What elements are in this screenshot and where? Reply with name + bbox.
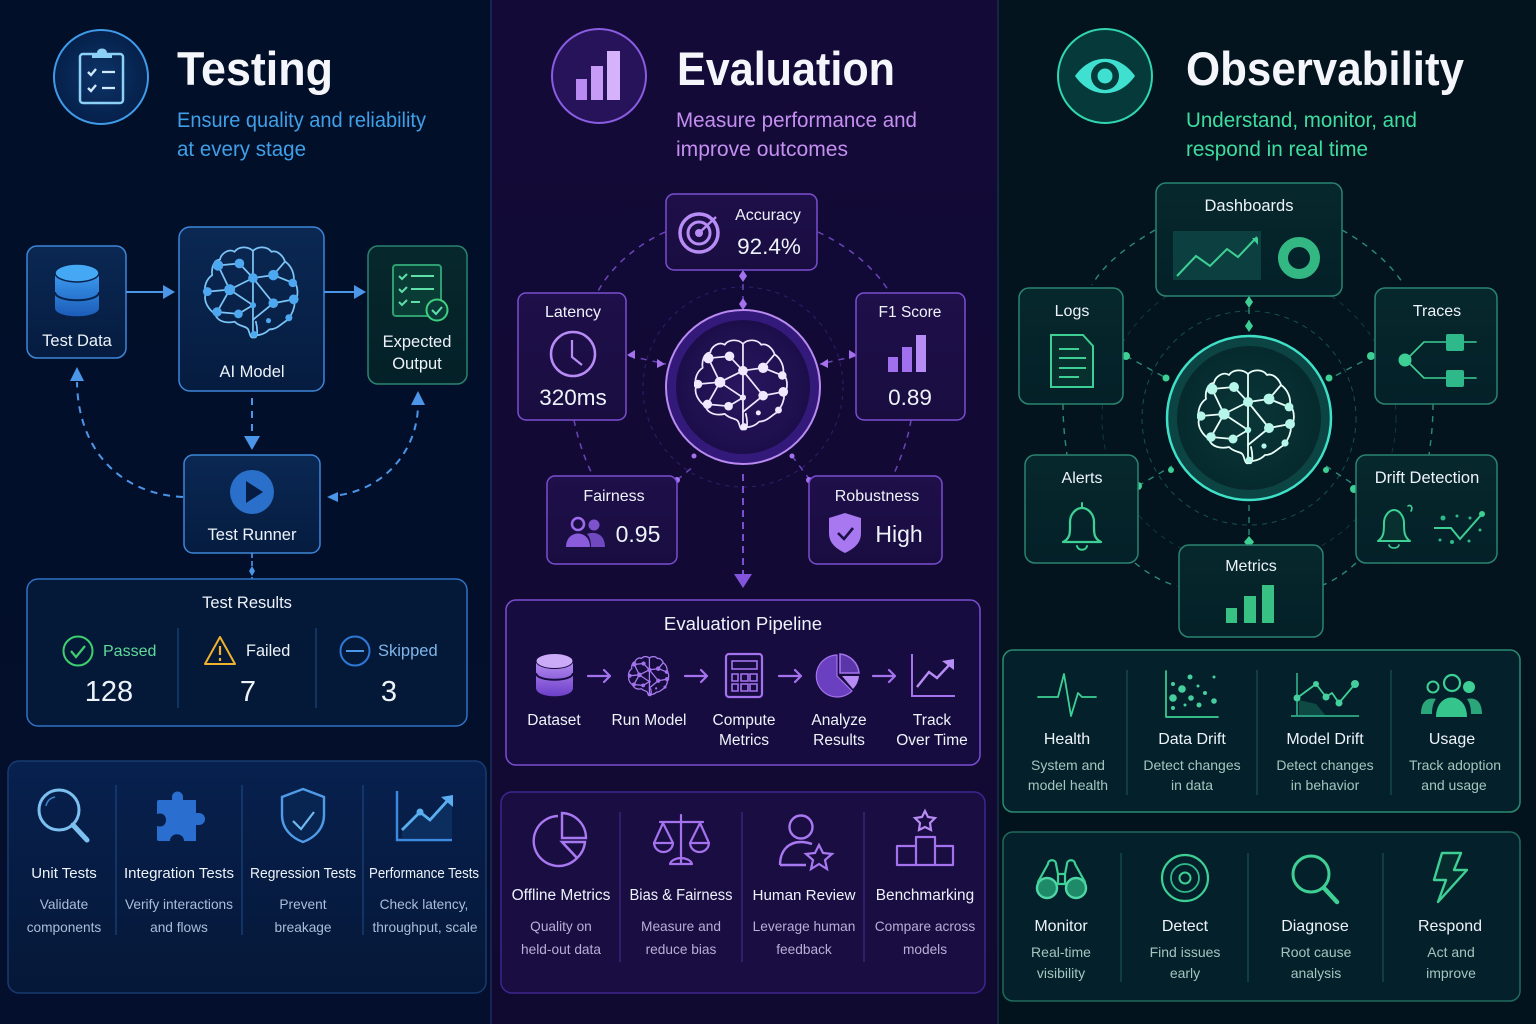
node: AI Model: AI Model [219,363,285,381]
arrow: model to output [324,285,366,299]
card: performance tests [369,791,479,935]
card: human review: Human Review [753,887,856,904]
card: data drift: Detect changes [1143,757,1241,773]
connector ring: evaluation orbit [574,232,911,487]
icon: clipboard checklist [54,30,148,124]
card: model drift: Detect changes [1276,757,1374,773]
card: performance tests: Check latency, [380,897,468,912]
card: monitor [1031,860,1091,981]
card: health: System and [1031,757,1105,773]
card: unit tests: components [27,920,101,935]
node: logs: Logs [1055,303,1089,320]
connector: runner to results [249,553,255,579]
panel: observability column [998,0,1536,1024]
step: track over time: Over Time [896,732,968,749]
card: benchmarking: models [903,942,947,957]
metric: passed [64,636,156,708]
metric: latency: 320ms [539,385,607,410]
card: human review: feedback [776,942,832,957]
card: regression tests: Regression Tests [250,865,356,882]
card: diagnose: Diagnose [1281,918,1349,935]
card: regression tests: Prevent [279,897,327,912]
card: detect: early [1170,965,1200,981]
card: integration tests: Verify interactions [125,897,233,912]
card: usage: Track adoption [1409,757,1501,773]
icon: eye badge [1058,29,1152,123]
arrows: pipeline flow [588,670,895,682]
metric: latency: Latency [545,304,601,321]
panel: test results: Test Results [202,594,292,612]
panel: test results [27,579,467,726]
hub: evaluation brain [666,310,820,464]
heading: Observability: Observability [1186,42,1464,95]
arrow: data to model [126,285,175,299]
metric: fairness [547,476,677,564]
card: health: Health [1044,731,1090,748]
metric: passed: Passed [103,643,156,660]
panel: test types [8,761,486,993]
arrow: to pipeline [734,474,752,588]
panel: evaluation pipeline [506,600,980,765]
step: run model: Run Model [612,712,686,729]
card: human review [753,816,856,957]
subtitle: testing: at every stage [177,138,306,161]
card: integration tests [124,792,234,935]
card: regression tests [250,789,356,935]
card: usage [1409,675,1501,793]
metric: accuracy: Accuracy [735,207,801,224]
step: dataset: Dataset [527,712,581,729]
metric: robustness: High [875,521,923,547]
metric: f1 score [856,293,965,420]
card: performance tests: Performance Tests [369,865,479,882]
subtitle: testing: Ensure quality and reliability [177,109,426,132]
subtitle: observability [1186,109,1417,161]
card: monitor: visibility [1037,965,1085,981]
subtitle: evaluation: Measure performance and [676,109,917,132]
card: model drift: Model Drift [1286,731,1364,748]
card: health: model health [1028,777,1108,793]
metric: failed: 7 [240,676,256,708]
card: performance tests: throughput, scale [372,920,478,935]
card: usage: and usage [1421,777,1487,793]
card: model drift [1276,673,1374,793]
card: respond: Respond [1418,918,1482,935]
heading: Testing: Testing [177,42,333,95]
node: Test Runner: Test Runner [208,526,297,544]
metric: skipped: Skipped [378,642,438,660]
metric: skipped: 3 [381,676,397,708]
metric: failed: Failed [246,642,290,660]
node: AI Model [179,227,324,391]
step: dataset [527,654,581,729]
panel: evaluation column [491,0,998,1024]
card: bias and fairness: reduce bias [646,942,717,957]
node: traces [1375,288,1497,404]
card: monitor: Real-time [1031,944,1091,960]
connector ring: observability orbit [1063,230,1433,586]
card: benchmarking: Benchmarking [876,887,974,904]
node: drift detection: Drift Detection [1375,469,1479,487]
metric: fairness: Fairness [583,488,645,505]
card: bias and fairness: Bias & Fairness [630,887,733,904]
card: bias and fairness: Measure and [641,919,721,934]
card: monitor: Monitor [1034,918,1088,935]
step: analyze results: Results [813,732,865,749]
card: regression tests: breakage [274,920,332,935]
metric: latency [518,293,626,420]
metric: f1 score: F1 Score [879,304,941,321]
card: detect: Detect [1162,918,1209,935]
metric: robustness [809,476,942,564]
node: dashboards [1156,183,1342,296]
panel: monitored signals [1003,650,1520,812]
node: Test Runner [184,455,320,553]
node: alerts: Alerts [1062,470,1102,487]
panel: operations loop [1003,832,1520,1001]
card: data drift: in data [1171,777,1213,793]
node: Expected Output: Expected [383,333,451,351]
arrow: runner to expected output [327,391,425,502]
panel: testing column [0,0,491,1024]
panel: evaluation pipeline: Evaluation Pipeline [664,613,822,634]
arrow: runner to test data [70,367,183,497]
card: usage: Usage [1429,731,1475,748]
card: offline metrics: Quality on [530,919,592,934]
node: Test Data [27,246,126,358]
card: benchmarking: Compare across [875,919,975,934]
subtitle: testing [177,109,426,161]
step: run model [612,657,686,729]
panel: evaluation methods [501,792,985,993]
card: diagnose [1281,856,1352,981]
metric: robustness: Robustness [835,488,919,505]
subtitle: evaluation [676,109,917,161]
card: human review: Leverage human [753,919,855,934]
card: unit tests [27,790,101,935]
card: detect [1150,855,1220,981]
node: drift detection [1356,455,1497,563]
card: detect: Find issues [1150,944,1220,960]
card: diagnose: analysis [1291,965,1341,981]
subtitle: observability: Understand, monitor, and [1186,109,1417,132]
step: analyze results [811,654,867,749]
card: model drift: in behavior [1291,777,1360,793]
card: data drift: Data Drift [1158,731,1226,748]
card: respond [1418,853,1482,981]
heading: Evaluation: Evaluation [677,42,895,95]
metric: passed: 128 [85,676,133,708]
card: respond: improve [1426,965,1476,981]
card: integration tests: and flows [150,920,208,935]
step: compute metrics [713,654,775,749]
step: compute metrics: Compute [713,712,775,729]
card: unit tests: Unit Tests [31,865,97,882]
card: bias and fairness [630,815,733,957]
card: offline metrics: held-out data [521,942,601,957]
node: Expected Output: Output [392,355,442,373]
card: integration tests: Integration Tests [124,865,234,882]
card: offline metrics: Offline Metrics [512,887,611,904]
metric: fairness: 0.95 [616,521,660,547]
node: dashboards: Dashboards [1205,197,1293,215]
node: metrics: Metrics [1225,558,1277,575]
icon: bar chart badge [552,29,646,123]
subtitle: evaluation: improve outcomes [676,138,848,161]
card: respond: Act and [1427,944,1475,960]
card: data drift [1143,671,1241,793]
node: alerts [1025,455,1138,563]
subtitle: observability: respond in real time [1186,138,1368,161]
node: metrics [1179,545,1323,637]
step: compute metrics: Metrics [719,732,769,749]
arrow: model to runner [244,398,260,450]
metric: accuracy: 92.4% [737,234,801,259]
metric: f1 score: 0.89 [888,385,932,410]
card: health [1028,674,1108,793]
step: track over time: Track [913,712,951,729]
metric: skipped [340,636,438,708]
node: Test Data: Test Data [42,332,113,350]
card: offline metrics [512,813,611,957]
step: analyze results: Analyze [811,712,867,729]
metric: accuracy [666,194,817,270]
card: diagnose: Root cause [1281,944,1352,960]
node: traces: Traces [1413,303,1461,320]
node: Expected Output [368,246,467,384]
card: unit tests: Validate [40,897,88,912]
node: logs [1019,288,1123,404]
card: benchmarking [875,811,975,957]
metric: failed [205,637,290,708]
hub: observability brain [1167,336,1331,500]
step: track over time [896,654,968,749]
